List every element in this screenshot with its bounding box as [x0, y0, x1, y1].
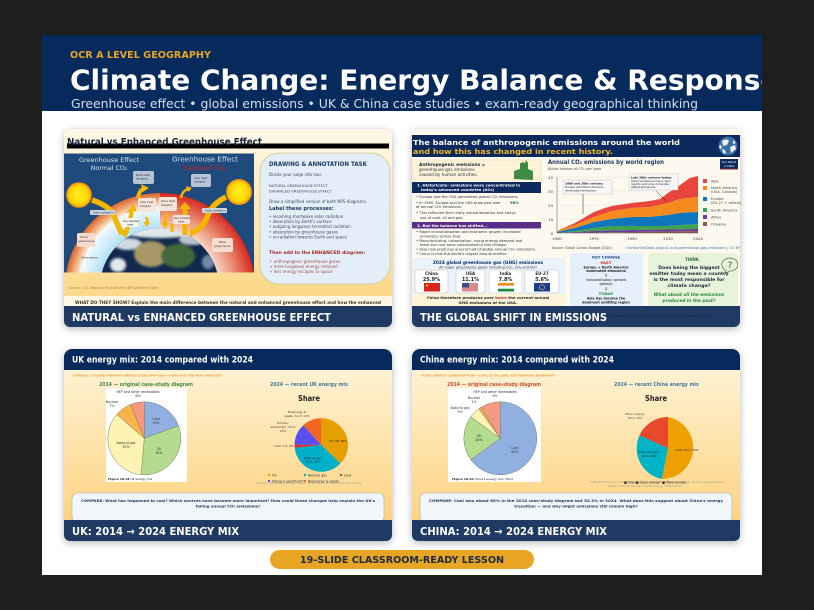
slide heading [67, 137, 389, 148]
pie chart: China 2014: Coal [511, 446, 519, 450]
section 1 historical emissions: • This reflected their early industrialisation and heavy [416, 211, 517, 215]
stacked area chart: 1990 [627, 236, 637, 241]
legend: South America [711, 208, 737, 212]
drawing and annotation task card: → less energy escapes to space [269, 269, 333, 274]
legend and footnote: ■ Coal ■ Clean energy* ■ Other energy [624, 480, 686, 484]
legend: North America [711, 186, 737, 190]
definition box: greenhouse-gas emissions [419, 167, 475, 172]
pie chart: China 2014: 1% [471, 400, 477, 404]
pie chart: UK 2014: 35% [122, 445, 130, 449]
subheading 2014: 2014 — original case-study diagram [447, 382, 541, 388]
think box: What about all the emissions [654, 292, 725, 298]
card: India [489, 270, 522, 293]
legend and footnote: *Official Chinese sources define clean energy as natural gas, nuclear, hydro, wind and solar. [590, 480, 725, 484]
panel: global shift in emissions [412, 129, 742, 327]
chart heading: Billion tonnes of CO₂ per year [548, 167, 602, 171]
compare prompt: COMPARE: Coal was about 65% in the 2014 case-study diagram but 53.2% in 2024. What does this suggest about China's energy [429, 498, 723, 503]
chart title: Share [298, 394, 320, 403]
annotation late 20th century to today: Late 20th century–today: [631, 176, 672, 180]
drawing and annotation task card: Then add to the ENHANCED diagram: [269, 250, 365, 256]
process labels: Less heat [140, 200, 154, 204]
caption bar [412, 306, 740, 327]
drawing and annotation task card: → more longwave energy retained [269, 264, 338, 269]
annotation 1900 to mid 20th century: Europe and North America [565, 185, 604, 189]
icon: sun left [66, 182, 92, 208]
annotation 1900 to mid 20th century [563, 180, 612, 214]
legend and footnote [256, 474, 362, 485]
pie chart: China 2024: Coal: 53.2; 53% [675, 448, 699, 452]
annotation 1900 to mid 20th century: 1900 and 20th century: [565, 182, 603, 186]
subtitle: Greenhouse effect • global emissions • UK & China case studies • exam-ready geographical thinking [71, 96, 698, 111]
greenhouse effect diagram: Rampant CO₂ [183, 164, 227, 172]
key change box: dominant emitting region [582, 300, 631, 304]
drawing and annotation task card [260, 153, 390, 284]
think box: THINK [685, 257, 700, 262]
definition box: Anthropogenic emissions = [419, 162, 486, 168]
legend and footnote: "Other" is the remainder of total energy consumption. [607, 484, 683, 488]
caption bar [412, 520, 740, 541]
key change box: PAST [601, 260, 612, 265]
process labels: escapes [136, 176, 148, 180]
card: EU-27 [525, 270, 559, 293]
legend and footnote: Primary electricity* [272, 480, 304, 484]
legend and footnote: *Primary electricity includes nuclear, wind, solar and hydro and net imports. [256, 481, 362, 485]
annotation late 20th century to today: global emissions. [631, 185, 656, 189]
stacked area chart: 20 [548, 203, 554, 208]
pie chart: China 2024: 28.6; 29% [642, 454, 657, 458]
caption bar: NATURAL vs ENHANCED GREENHOUSE EFFECT [72, 312, 332, 324]
pie chart: UK 2014: Coal [152, 417, 160, 421]
caption bar: UK: 2014 → 2024 ENERGY MIX [72, 526, 239, 538]
legend and footnote: Coal [344, 474, 351, 478]
card: EU-27: 5.6% [535, 277, 549, 283]
key change box: TODAY [599, 291, 614, 296]
pie chart: UK 2014: HEP and other renewables [116, 390, 160, 394]
solar arrows [92, 188, 226, 235]
process labels: More heat [161, 199, 176, 203]
pie chart: UK 2014: Figure 10.18 UK energy mix [108, 477, 153, 481]
legend and footnote: Natural gas [308, 474, 327, 478]
chart heading [548, 160, 664, 171]
think box [648, 253, 738, 306]
slide header: China energy mix: 2014 compared with 2024 [420, 356, 614, 366]
compare prompt: falling annual CO₂ emissions? [196, 504, 260, 508]
pie chart: UK 2014: 32% [155, 451, 163, 455]
pie chart: UK 2014: 7% [109, 404, 115, 408]
section 2 balance has shifted: • Manufacturing, urbanisation, rising energy demand and [416, 239, 522, 243]
section 2 balance has shifted: • Asia now produces around half of global annual CO₂ emissions. [416, 248, 536, 252]
pie chart: UK 2014: Oil [157, 447, 161, 451]
drawing and annotation task card: ENHANCED GREENHOUSE EFFECT [269, 190, 333, 194]
legend and footnote [590, 480, 725, 488]
think box: Does being the biggest [658, 265, 720, 271]
2024 global GHG emissions box [412, 258, 565, 306]
card: China [415, 270, 448, 293]
key change box: Asia has become the [587, 296, 626, 300]
think box: climate change? [668, 283, 711, 289]
section 1 historical emissions [412, 182, 541, 220]
process labels: heat [127, 222, 134, 226]
section 1 historical emissions: • Europe and the USA dominated global CO₂ emissions. [416, 195, 519, 199]
china comparison note: GHG emissions of the USA. [459, 300, 518, 305]
pie chart: China 2024 [625, 412, 699, 479]
greenhouse effect diagram [64, 154, 254, 272]
stacked area chart: 10 [548, 217, 554, 222]
pie chart: China 2014: 9% [492, 394, 498, 398]
2024 global GHG emissions box: 2024 global greenhouse gas (GHG) emissions [433, 260, 544, 266]
process labels: Solar radiation [205, 208, 226, 212]
icon: sun right [226, 179, 252, 205]
process labels: greenhouse [78, 239, 95, 243]
process labels: Re-radiated [174, 216, 190, 220]
drawing and annotation task card: DRAWING & ANNOTATION TASK [269, 161, 367, 168]
pie chart: UK 2024: electricity*: 13.3; [270, 425, 296, 429]
slide title band: and how this has changed in recent history. [413, 147, 613, 156]
process labels: heat [178, 220, 185, 224]
slide title band [412, 135, 740, 157]
process labels: More [219, 240, 226, 244]
stacked area chart: 2024 [693, 236, 703, 241]
stacked area chart: 30 [548, 189, 554, 194]
lesson badge pill: 19-SLIDE CLASSROOM-READY LESSON [300, 555, 504, 566]
key change box: KEY CHANGE [592, 254, 620, 260]
card: India: India [500, 271, 511, 276]
caption bar: THE GLOBAL SHIFT IN EMISSIONS [420, 312, 607, 324]
caption bar [64, 306, 392, 327]
compare prompt [420, 493, 732, 523]
section 2 balance has shifted: 2. But the balance has shifted... [417, 223, 488, 228]
chart title: Share [645, 394, 667, 403]
pie chart: China 2014: Natural gas [450, 406, 470, 410]
stacked area chart: OurWorldInData.org/co2-and-greenhouse-gas-emissions | CC BY [626, 246, 740, 250]
section 2 balance has shifted: • Rapid industrialisation and economic growth increased [416, 230, 521, 234]
main title: Climate Change: Energy Balance & Response [70, 64, 779, 96]
source note: Source: U.S. National Park Service (NPS)/William Elder [69, 286, 159, 290]
section 1 historical emissions: today's advanced countries (ACs) [421, 187, 495, 192]
greenhouse effect diagram: Greenhouse Effect [172, 156, 238, 164]
slide background [42, 35, 762, 575]
card: China: 25.9% [423, 277, 440, 283]
chart heading: Annual CO₂ emissions by world region [548, 160, 664, 166]
legend and footnote: Oil [272, 474, 277, 478]
card: EU-27: EU-27 [535, 271, 549, 276]
pie chart: China 2014: HEP and other renewables [473, 390, 517, 394]
pie chart: UK 2014: 6% [135, 394, 141, 398]
think box: emitter today mean a country [649, 271, 729, 277]
legend: Asia [711, 180, 719, 184]
pie chart: UK 2024: Coal: 1.5; 2% [274, 444, 294, 448]
drawing and annotation task card: • re-radiation towards Earth and space [269, 234, 347, 240]
slide header [64, 349, 392, 370]
pie chart: UK 2024 [270, 410, 348, 472]
legend: Oceania [711, 222, 726, 226]
definition box: caused by human activities. [419, 172, 478, 177]
drawing and annotation task card: Label these processes: [269, 206, 334, 212]
legend: Africa [711, 216, 721, 220]
process labels: Most heat [136, 173, 151, 177]
legend: Europe [711, 197, 724, 201]
process labels [77, 171, 233, 260]
stacked area chart [548, 159, 742, 250]
drawing and annotation task card: • absorption by Earth's surface [269, 219, 332, 224]
china comparison note: China therefore produces over twice the current annual [427, 295, 549, 300]
pie chart: UK 2024: Primary [277, 421, 289, 425]
process labels: Less heat [194, 176, 208, 180]
process labels: trapped [140, 204, 151, 208]
section 1 historical emissions: 98% [510, 201, 519, 205]
section 1 historical emissions: • In 1900, Europe and the USA produced over [416, 201, 501, 205]
slide title band: The balance of anthropogenic emissions around the world [413, 138, 680, 147]
panel: natural vs enhanced greenhouse effect [64, 129, 392, 347]
caption bar [64, 520, 392, 541]
compare prompt [72, 493, 384, 523]
think box: is the most responsible for [653, 277, 725, 283]
drawing and annotation task card: Divide your page into two: [269, 172, 322, 177]
process labels: escapes [194, 180, 206, 184]
Our World in Data logo: in Data [724, 164, 734, 168]
pie chart: China 2014: Oil [477, 434, 481, 438]
section 2 balance has shifted: emissions across Asia. [420, 234, 461, 238]
pie chart: UK 2014: 19% [152, 421, 160, 425]
key change box: ↓ [604, 272, 608, 278]
greenhouse effect diagram: Normal CO₂ [91, 165, 128, 172]
process labels: Solar radiation [93, 210, 114, 214]
pie chart: UK 2024: 35.8; 36% [306, 460, 321, 464]
section 2 balance has shifted: fossil-fuel use have contributed to this change. [420, 243, 507, 247]
drawing and annotation task card: • outgoing longwave terrestrial radiation [269, 224, 351, 229]
pie chart: China 2024: Other energy: [625, 412, 645, 416]
legend: (USA, Canada) [711, 190, 738, 194]
process labels: greenhouse [214, 244, 231, 248]
drawing and annotation task card: • incoming shortwave solar radiation [269, 214, 344, 219]
pie chart: UK 2024: Natural gas: [304, 456, 322, 460]
header banner [42, 35, 779, 111]
question strip: WHAT DO THEY SHOW? Explain the main difference between the natural and enhanced greenhouse effect and how the enhanced [75, 300, 381, 306]
Our World in Data logo [720, 159, 738, 170]
pie chart: China 2014: Nuclear [468, 396, 481, 400]
card: USA [456, 270, 485, 293]
drawing and annotation task card: NATURAL GREENHOUSE EFFECT [269, 184, 329, 188]
annotation 1900 to mid 20th century: dominated emissions. [565, 188, 597, 192]
icon: globe [718, 136, 738, 156]
caption bar: CHINA: 2014 → 2024 ENERGY MIX [420, 526, 607, 538]
process labels: Some [80, 235, 88, 239]
slide header: UK energy mix: 2014 compared with 2024 [72, 356, 253, 366]
slide heading: Natural vs Enhanced Greenhouse Effect [67, 137, 262, 148]
2024 global GHG emissions box: All major greenhouse gases including CO₂, CH₄ and N₂O [439, 266, 537, 270]
think box: produced in the past? [662, 298, 716, 304]
card: China: China [425, 271, 438, 276]
diagram titles: Greenhouse Effect [79, 157, 140, 164]
key change box: globally [600, 282, 613, 286]
eyebrow: TOTAL ENERGY CONSUMPTION • COAL IS FALLING, BUT REMAINS DOMINANT [421, 374, 555, 378]
stacked area chart: 2010 [663, 236, 673, 241]
pie chart: UK 2014 [106, 388, 187, 482]
Our World in Data logo: Our World [722, 160, 736, 164]
subheading 2024: 2024 — recent China energy mix [614, 382, 700, 388]
process labels: trapped [161, 203, 172, 207]
question strip [64, 296, 392, 306]
legend [703, 179, 742, 226]
legend and footnote: Bioenergy & waste [308, 480, 339, 484]
pie chart: China 2014: 20% [475, 438, 483, 442]
china comparison note [412, 294, 565, 306]
stacked area chart: 1900 [552, 236, 562, 241]
pie chart: UK 2024: 13% [280, 429, 286, 433]
annotation late 20th century to today: Asia's emissions have risen [631, 179, 671, 183]
compare prompt: COMPARE: What has happened to coal? Which sources have become more important? How could these changes help explain the UK's [81, 498, 376, 503]
pie chart: UK 2024: Bioenergy & [288, 410, 307, 414]
eyebrow: OVERALL / ISLAND PRIMARY ENERGY CONSUMPTION • HOW HAS THE MIX CHANGED? [73, 374, 222, 378]
key change box: Europe + North America [583, 266, 629, 270]
pie chart: UK 2014: Natural gas [116, 441, 136, 445]
earth globe [102, 228, 218, 272]
section 1 historical emissions: 1. Historically: emissions were concentrated in [417, 182, 520, 188]
pie chart: China 2014: 65% [511, 450, 519, 454]
caption bar: Emissions have risen rapidly and shifted towards Asia [610, 314, 710, 318]
pie chart: China 2014 [448, 388, 541, 482]
pie chart: China 2014: Figure 10.20 China's energy mix, 2014 [452, 477, 513, 481]
panel: UK energy mix [64, 349, 392, 541]
section 2 balance has shifted [412, 222, 541, 256]
pie chart: China 2024: Clean energy*: [638, 450, 660, 454]
key change box: Industrialisation spreads [586, 278, 626, 282]
pie chart: UK 2014: Nuclear [106, 400, 119, 404]
stacked area chart: 40 [548, 175, 554, 180]
annotation late 20th century to today: rapidly and now dominate [631, 182, 669, 186]
process labels: Re-radiated [123, 219, 139, 223]
drawing and annotation task card: • absorption by greenhouse gases [269, 230, 338, 234]
compare prompt: transition — and why might emissions still remain high? [514, 504, 638, 508]
icon: factory [514, 160, 533, 180]
subheading 2014: 2014 — original case-study diagram [99, 382, 193, 388]
card: India: 7.8% [499, 277, 512, 283]
pie chart: China 2024: 18.2; 18% [628, 416, 643, 420]
eyebrow label: OCR A LEVEL GEOGRAPHY [70, 50, 212, 61]
pie chart: UK 2024: Oil: 38; 38% [329, 439, 347, 443]
stacked area chart: 1970 [589, 236, 599, 241]
stacked area chart: 0 [551, 231, 554, 236]
key change box: dominated emissions [586, 269, 626, 273]
legend: (EU-27 + others) [711, 201, 742, 205]
card: USA: 11.1% [462, 277, 479, 283]
drawing and annotation task card: Draw a simplified version of both NPS diagrams. [269, 199, 367, 204]
pie chart: UK 2024: waste: 12.3; 12% [284, 414, 310, 418]
subheading 2024: 2024 — recent UK energy mix [270, 382, 349, 388]
chart source line: Source: Global Carbon Budget (2024) [552, 246, 612, 250]
lesson badge pill [270, 550, 534, 569]
section 1 historical emissions: of annual CO₂ emissions. [416, 205, 462, 209]
process labels: Atmosphere [81, 256, 98, 260]
icon: thought bubble: ? [728, 261, 733, 271]
annotation late 20th century to today [629, 174, 678, 201]
pie chart: China 2014: 5% [457, 410, 463, 414]
drawing and annotation task card: ↑ anthropogenic greenhouse gases [269, 259, 340, 264]
key change box: ↓ [604, 286, 608, 291]
card: USA: USA [466, 271, 476, 276]
panel: China energy mix [412, 349, 740, 541]
section 1 historical emissions: use of coal, oil and gas. [420, 216, 464, 220]
key change box [570, 253, 643, 306]
definition box [412, 160, 541, 180]
section 2 balance has shifted: • China is now the world's largest annual emitter. [416, 252, 507, 256]
slide header [412, 349, 740, 370]
